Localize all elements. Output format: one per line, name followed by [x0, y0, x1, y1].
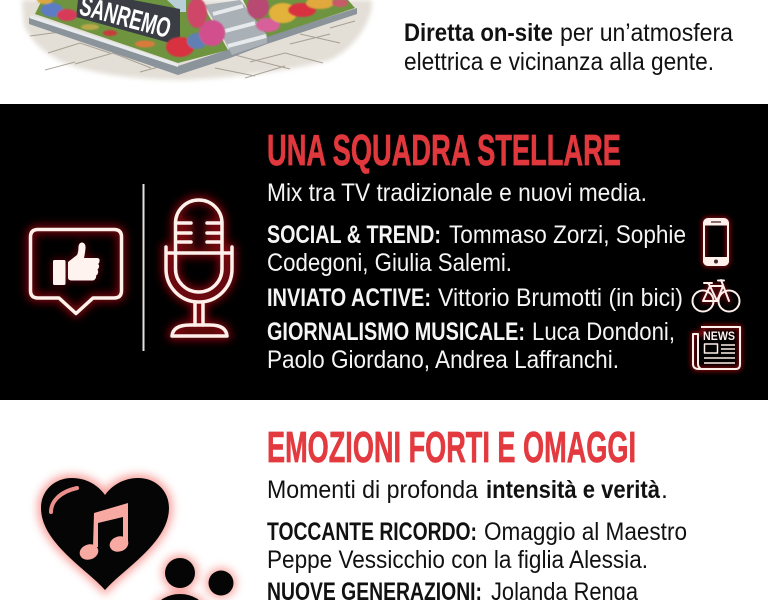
grass bed — [35, 0, 228, 63]
text block: diretta on-site: Diretta on-site — [404, 19, 553, 47]
text: giornalismo musicale: GIORNALISMO MUSICALE: — [267, 318, 525, 346]
intro text: Mix tra TV tradizionale e nuovi media. — [267, 179, 647, 207]
text: giornalismo musicale: Luca Dondoni, — [532, 318, 675, 346]
text: inviato active — [267, 284, 683, 312]
text: toccante ricordo — [267, 518, 687, 574]
stone steps — [205, 0, 267, 55]
intro text: Momenti di profonda — [267, 476, 478, 504]
text: toccante ricordo: Omaggio al Maestro — [484, 518, 687, 546]
text: inviato active: Vittorio Brumotti (in bici) — [438, 284, 683, 312]
icon: heart with music note — [41, 478, 169, 590]
right grass bed — [243, 0, 355, 37]
text block: diretta on-site: per un’atmosfera — [560, 19, 733, 47]
flowers — [37, 0, 348, 57]
planter border — [29, 8, 357, 75]
illustration: Sanremo stage with flowers — [22, 0, 372, 80]
divider line — [142, 184, 144, 351]
icon: bicycle — [692, 280, 740, 312]
text block: diretta on-site: elettrica e vicinanza alla gente. — [404, 48, 714, 76]
text: giornalismo musicale — [267, 318, 675, 374]
stage glass — [167, 0, 186, 12]
icon: newspaper: NEWS — [703, 331, 735, 343]
text: social e trend: SOCIAL & TREND: — [267, 221, 441, 249]
text: social e trend: Tommaso Zorzi, Sophie — [449, 221, 686, 249]
text: giornalismo musicale: Paolo Giordano, Andrea Laffranchi. — [267, 346, 619, 374]
intro text: intensità e verità — [486, 476, 660, 504]
icon: newspaper — [693, 327, 740, 369]
panel: emozioni forti e omaggi — [41, 423, 687, 600]
icon: smartphone — [703, 218, 729, 266]
icon: people — [153, 555, 236, 600]
text block: diretta on-site — [404, 19, 733, 76]
icon: microphone — [166, 200, 232, 336]
text: social e trend — [267, 221, 686, 277]
paved ground — [22, 0, 372, 80]
intro text: . — [661, 476, 668, 504]
panel: una squadra stellare — [0, 104, 768, 400]
intro text — [267, 476, 668, 504]
icon: thumbs up speech bubble — [30, 230, 122, 314]
sign block — [76, 0, 180, 44]
text: toccante ricordo: Peppe Vessicchio con la figlia Alessia. — [267, 546, 648, 574]
text: inviato active: INVIATO ACTIVE: — [267, 284, 431, 312]
text: social e trend: Codegoni, Giulia Salemi. — [267, 249, 512, 277]
text: toccante ricordo: TOCCANTE RICORDO: — [267, 518, 477, 546]
